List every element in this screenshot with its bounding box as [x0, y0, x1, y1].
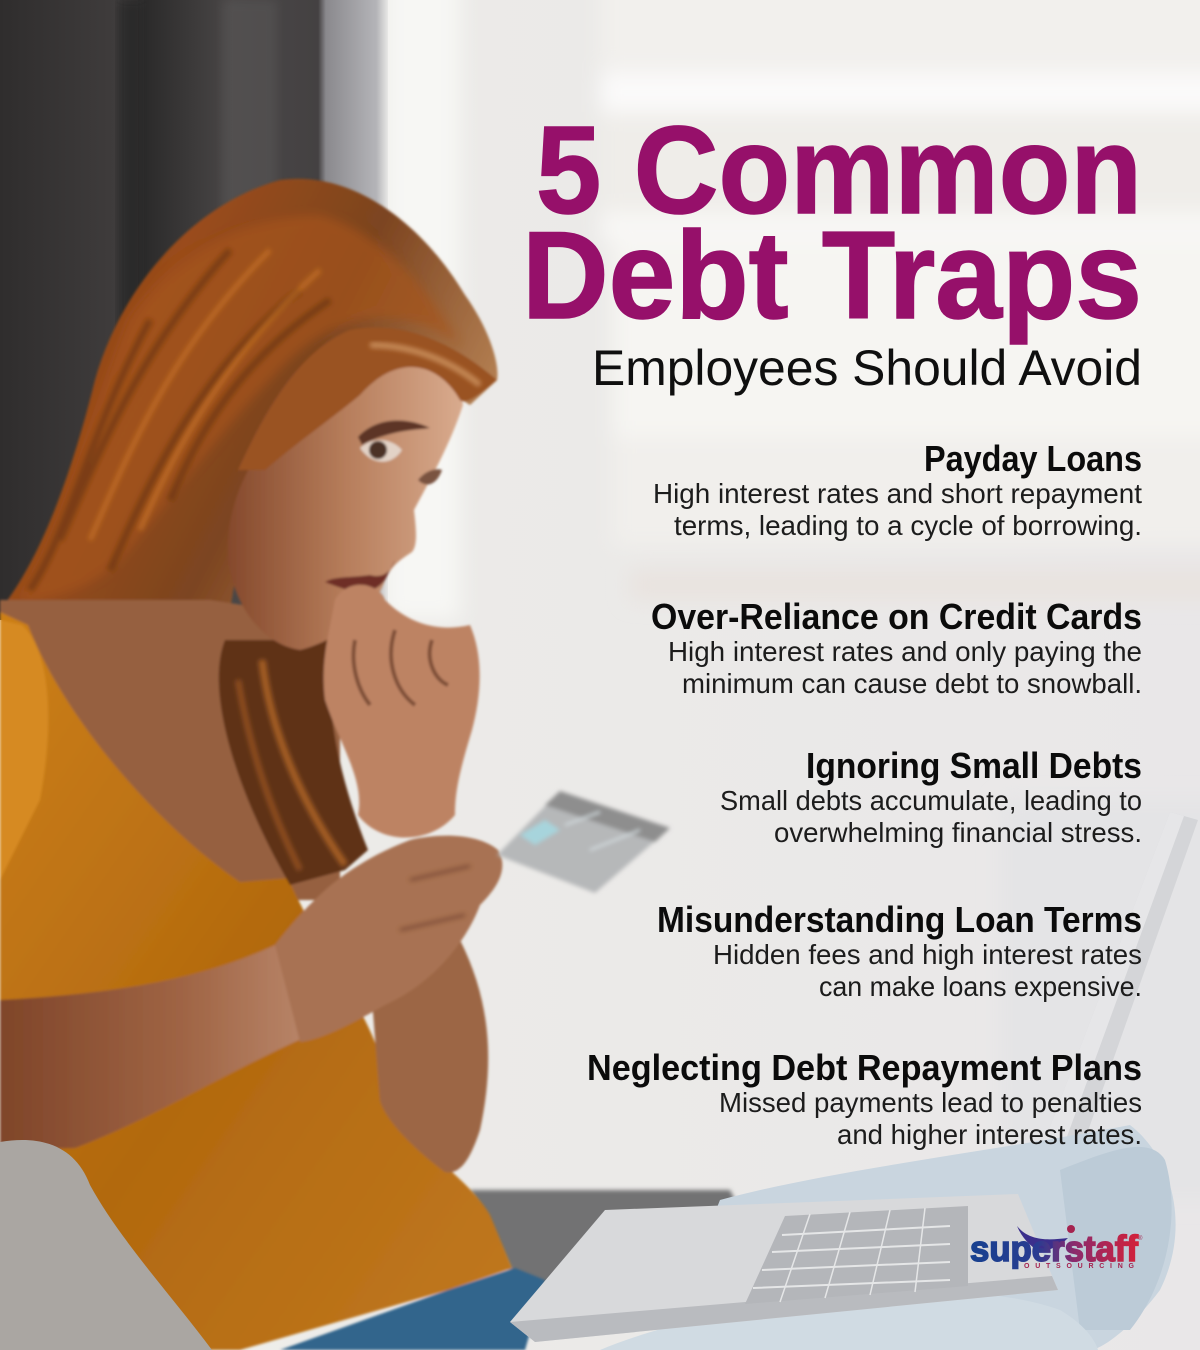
- near hand: [275, 836, 502, 1042]
- trap 1: payday loans: Payday Loans: [924, 438, 1142, 479]
- sofa: [470, 1190, 760, 1290]
- keyboard: [745, 1206, 968, 1304]
- trap 3: small debts: Small debts accumulate, leading to: [720, 785, 1142, 816]
- woman: [0, 179, 545, 1350]
- title: [522, 102, 1142, 396]
- trap 1: payday loans: [653, 438, 1142, 541]
- eye and brow: [358, 421, 430, 445]
- trap 3: small debts: overwhelming financial stress.: [774, 817, 1142, 848]
- logo: superstaff outsourcing: OUTSOURCING: [1024, 1263, 1135, 1270]
- shirt: [0, 612, 512, 1350]
- hair back: [0, 179, 498, 660]
- trap 2: credit cards: Over-Reliance on Credit Cards: [651, 596, 1142, 637]
- jeans lower: [280, 1268, 545, 1350]
- title: Debt Traps: [522, 207, 1142, 345]
- hair fringe: [238, 327, 497, 470]
- trap 5: repayment plans: and higher interest rates.: [837, 1119, 1142, 1150]
- trap 4: loan terms: [657, 899, 1142, 1002]
- trap 5: repayment plans: Neglecting Debt Repayment Plans: [587, 1047, 1142, 1088]
- title: Employees Should Avoid: [592, 340, 1142, 396]
- trap 4: loan terms: can make loans expensive.: [819, 971, 1142, 1002]
- laptop base: [510, 1194, 1058, 1342]
- trap 2: credit cards: High interest rates and only paying the: [668, 636, 1142, 667]
- jeans on crossed leg: [600, 1125, 1176, 1350]
- laptop screen edge: [1022, 812, 1198, 1210]
- trap 2: credit cards: [651, 596, 1142, 699]
- credit card: [497, 791, 670, 893]
- trap 4: loan terms: Misunderstanding Loan Terms: [657, 899, 1142, 940]
- dark curtain: [0, 0, 388, 620]
- neck and chest: [0, 600, 340, 900]
- pillow: [0, 1140, 212, 1350]
- logo: superstaff outsourcing: ®: [1138, 1235, 1143, 1242]
- hair lock over chest: [219, 625, 368, 885]
- trap 5: repayment plans: [587, 1047, 1142, 1150]
- trap 1: payday loans: High interest rates and short repayment: [653, 478, 1142, 509]
- trap 3: small debts: Ignoring Small Debts: [806, 745, 1142, 786]
- face: [228, 355, 463, 650]
- raised fist: [324, 585, 480, 838]
- far arm: [372, 940, 488, 1172]
- trap 1: payday loans: terms, leading to a cycle of borrowing.: [674, 510, 1142, 541]
- trap 4: loan terms: Hidden fees and high interest rates: [713, 939, 1142, 970]
- trap 2: credit cards: minimum can cause debt to snowball.: [682, 668, 1142, 699]
- logo: superstaff outsourcing: superstaff: [970, 1228, 1139, 1269]
- title: 5 Common: [536, 102, 1142, 240]
- trap 3: small debts: [720, 745, 1142, 848]
- near forearm: [0, 945, 310, 1150]
- trap 5: repayment plans: Missed payments lead to penalties: [719, 1087, 1142, 1118]
